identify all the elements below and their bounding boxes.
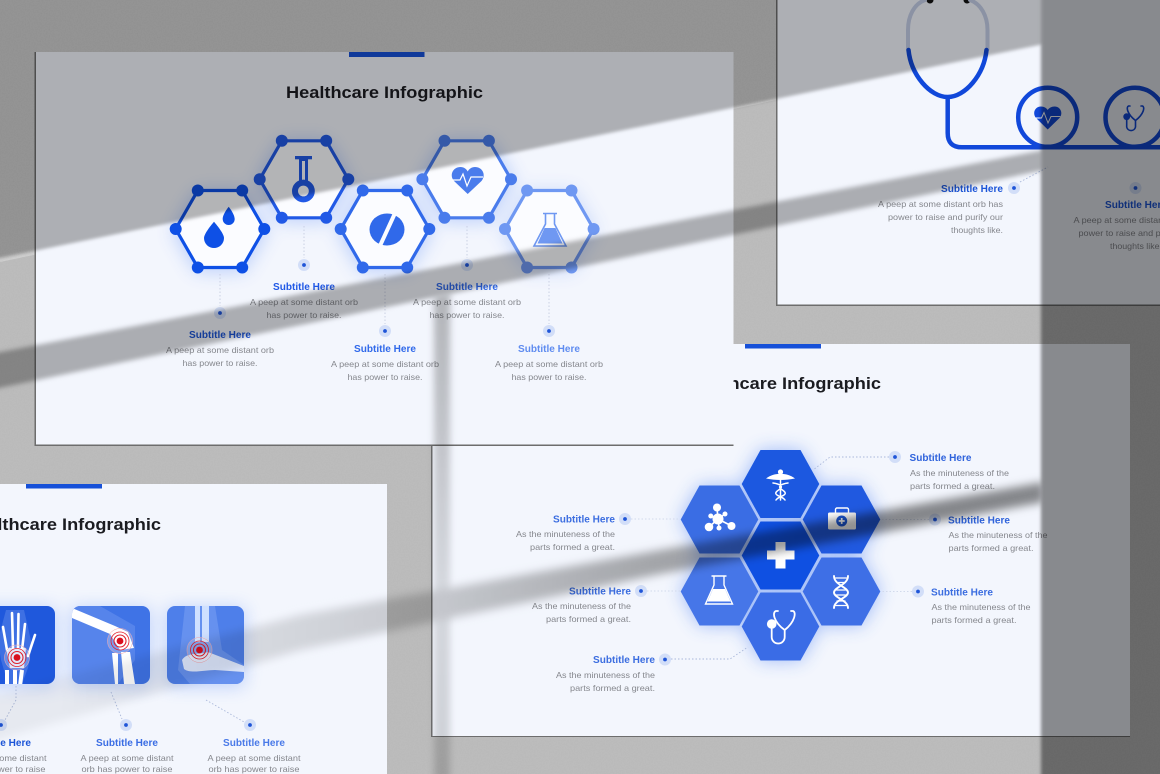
- callout: middle right: Subtitle Here: [948, 516, 1010, 526]
- icon: DNA helix: [834, 576, 848, 608]
- connector lines: [220, 226, 549, 324]
- panel: hexagon cluster slide: [431, 344, 1130, 737]
- callout: lower left: parts formed a great.: [570, 683, 655, 693]
- callout: lower right: parts formed a great.: [932, 615, 1016, 625]
- callout: lower left: As the minuteness of the: [556, 670, 655, 680]
- title: clipped slide heading: Healthcare Infographic: [684, 374, 881, 393]
- callout: first stethoscope label: A peep at some distant orb has: [878, 199, 1003, 209]
- icon: first aid kit: [828, 508, 856, 530]
- icon: heart in circle: [1018, 88, 1077, 147]
- callout: first stethoscope label: power to raise and purify our: [888, 212, 1003, 222]
- callout: flask: Subtitle Here: [518, 344, 580, 355]
- callout: middle left: parts formed a great.: [546, 614, 631, 624]
- callout: right: [208, 719, 301, 774]
- callout: middle left: [532, 585, 647, 624]
- callout: lower left: [556, 654, 671, 693]
- callout: test tube: has power to raise.: [266, 310, 342, 320]
- icon: stethoscope in circle: [1106, 88, 1160, 147]
- icon: flask: [706, 576, 732, 604]
- callout: pill: [331, 325, 439, 382]
- connector lines: [1020, 167, 1048, 182]
- callout: heart: A peep at some distant orb: [413, 297, 521, 307]
- callout: middle right: As the minuteness of the: [948, 530, 1048, 540]
- hexagon chain glow: [172, 140, 597, 272]
- icon: medical cross: [767, 542, 794, 568]
- callout: water drops: [166, 307, 274, 368]
- callout: flask: A peep at some distant orb: [495, 359, 603, 369]
- hexagon: water drops: [170, 184, 270, 274]
- callout: lower right: Subtitle Here: [931, 588, 993, 598]
- callout: middle: A peep at some distant: [80, 753, 174, 763]
- callout: heart: has power to raise.: [430, 310, 504, 320]
- callout: right: orb has power to raise: [208, 764, 300, 774]
- callout: heart: [413, 259, 521, 320]
- callout: middle: [80, 719, 174, 774]
- callout: first stethoscope label: Subtitle Here: [941, 184, 1003, 195]
- image glow: [0, 608, 244, 686]
- callout: middle right: parts formed a great.: [948, 543, 1034, 553]
- callout: right: A peep at some distant: [208, 753, 301, 763]
- callout: pill: A peep at some distant orb: [331, 359, 439, 369]
- callout: first stethoscope label: [878, 182, 1020, 235]
- callout: second stethoscope label: [1074, 182, 1160, 251]
- callout: middle: Subtitle Here: [96, 738, 158, 749]
- hexagon: heart: [416, 135, 517, 224]
- callout: top right: [889, 451, 1009, 491]
- callout: upper left: Subtitle Here: [553, 514, 615, 526]
- callout: top right: As the minuteness of the: [910, 468, 1009, 478]
- callout: test tube: A peep at some distant orb: [250, 297, 358, 307]
- callout: middle left: Subtitle Here: [569, 586, 631, 598]
- panel: linked hexagons slide: [34, 52, 734, 446]
- hexagon: pill: [335, 184, 435, 274]
- hexagon: flask: [499, 184, 600, 274]
- callout: water drops: Subtitle Here: [189, 330, 251, 341]
- hexagon cluster diagram: [681, 450, 880, 660]
- image: hand x-ray: [0, 606, 55, 686]
- stethoscope line diagram: [908, 0, 1160, 147]
- panel: bone joint slide: [0, 484, 387, 774]
- callout: pill: has power to raise.: [348, 372, 422, 382]
- image: knee x-ray: [72, 606, 150, 684]
- callout: middle: orb has power to raise: [82, 764, 173, 774]
- icon: molecule: [705, 504, 736, 531]
- callout: water drops: A peep at some distant orb: [166, 345, 274, 355]
- icon: caduceus: [766, 469, 795, 500]
- callout: upper left: [516, 513, 631, 552]
- connector lines: [631, 457, 929, 659]
- callout: lower right: As the minuteness of the: [932, 602, 1031, 612]
- callout: flask: [495, 325, 603, 382]
- callout: test tube: [250, 259, 358, 320]
- callout: lower right: [912, 586, 1031, 625]
- connector lines: [5, 686, 244, 722]
- image: foot x-ray: [167, 606, 244, 684]
- callout: heart: Subtitle Here: [436, 282, 498, 293]
- callout: middle left: As the minuteness of the: [532, 601, 631, 611]
- callout: lower left: Subtitle Here: [593, 655, 655, 666]
- panel: stethoscope slide: [776, 0, 1160, 306]
- icon: stethoscope: [767, 611, 795, 644]
- callout: left: [0, 719, 47, 774]
- callout: upper left: parts formed a great.: [530, 542, 615, 552]
- callout: flask: has power to raise.: [512, 372, 586, 382]
- title: Healthcare Infographic: [286, 83, 483, 102]
- callout: test tube: Subtitle Here: [273, 282, 335, 293]
- callout: pill: Subtitle Here: [354, 344, 416, 355]
- callout: first stethoscope label: thoughts like.: [951, 225, 1003, 235]
- callout: second stethoscope label: thoughts like.: [1110, 241, 1160, 251]
- callout: middle right: [929, 514, 1048, 553]
- callout: top right: parts formed a great.: [910, 481, 995, 491]
- hexagon: test tube: [254, 135, 354, 224]
- callout: water drops: has power to raise.: [182, 358, 258, 368]
- callout: right: Subtitle Here: [223, 738, 285, 749]
- callout: top right: Subtitle Here: [910, 453, 972, 464]
- callout: upper left: As the minuteness of the: [516, 529, 615, 539]
